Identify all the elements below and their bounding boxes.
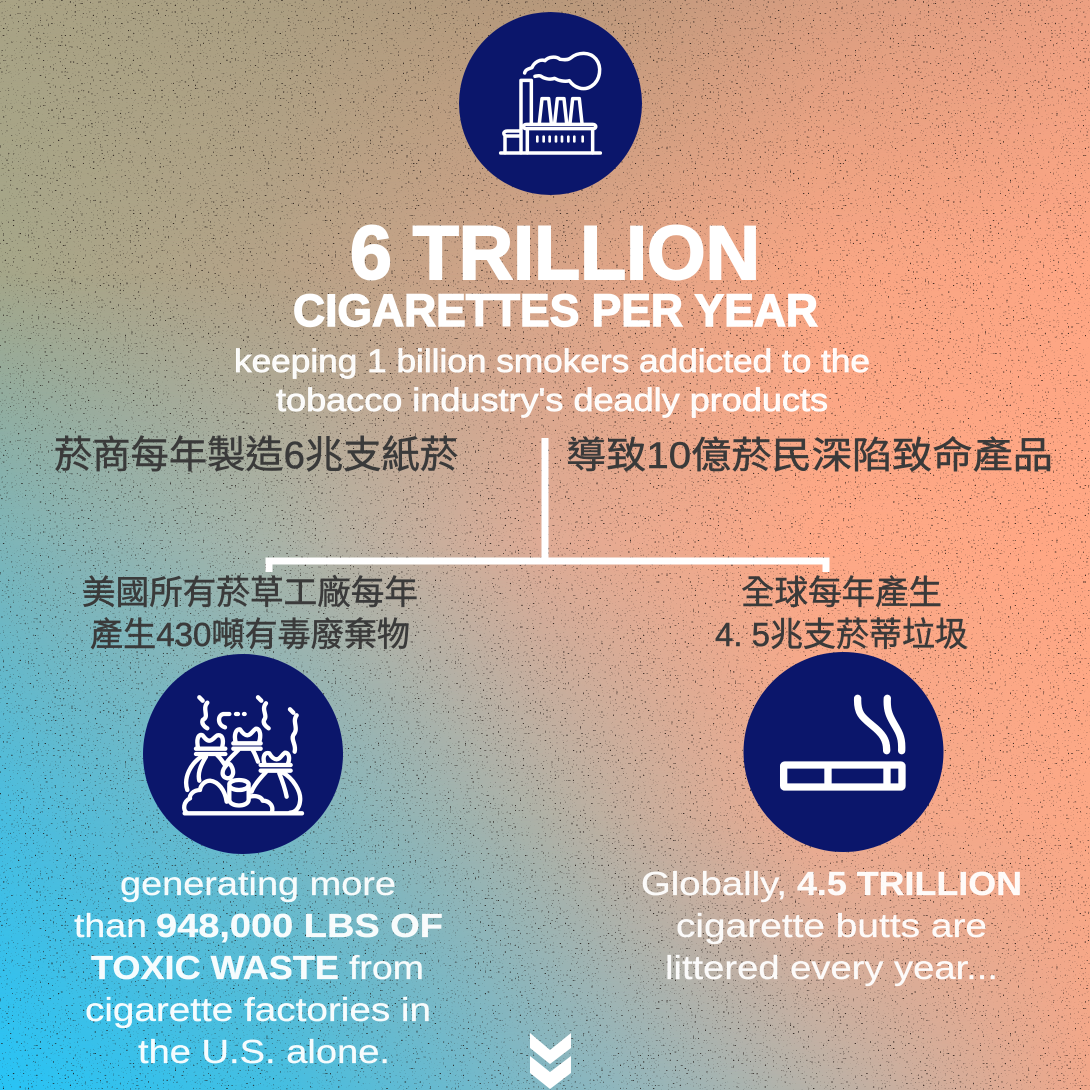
text block: toxic waste: [74, 865, 443, 1070]
text block: toxic waste: than: [74, 907, 147, 944]
arrow: scroll down chevrons: [530, 1033, 571, 1089]
text block: keeping smokers addicted: [234, 343, 870, 418]
chinese heading left: 菸商每年製造6兆支紙菸: [54, 435, 458, 477]
chinese heading right: 導致10億菸民深陷致命產品: [566, 435, 1053, 476]
text block: cigarette butts: cigarette butts are: [676, 907, 987, 944]
text block: cigarette butts: 4.5 TRILLION: [797, 865, 1022, 902]
text block: toxic waste: 948,000 LBS OF: [156, 907, 443, 944]
icon: burning cigarette: [744, 652, 944, 852]
title: 6 trillion: 6 TRILLION: [350, 211, 760, 296]
chinese caption right: [715, 575, 968, 654]
chinese caption right: 全球每年產生: [741, 575, 942, 612]
text block: cigarette butts: [641, 865, 1022, 986]
chinese caption right: 4. 5兆支菸蒂垃圾: [715, 617, 968, 654]
connector: branching tree lines: [269, 438, 826, 572]
text block: toxic waste: cigarette factories in: [85, 991, 431, 1028]
text block: keeping smokers addicted: tobacco industry's deadly products: [276, 382, 828, 418]
text block: cigarette butts: Globally,: [641, 865, 787, 902]
chinese caption left: 產生430噸有毒廢棄物: [90, 617, 410, 654]
text block: toxic waste: TOXIC WASTE: [91, 949, 339, 986]
icon: factory with smoke: [459, 12, 642, 195]
text block: toxic waste: from: [349, 949, 424, 986]
chinese caption left: 美國所有菸草工廠每年: [82, 575, 418, 612]
text block: keeping smokers addicted: keeping 1 billion smokers addicted to the: [234, 343, 870, 379]
chinese caption left: [82, 575, 418, 654]
text block: cigarette butts: littered every year...: [665, 949, 998, 986]
icon: garbage bags with stench: [143, 654, 343, 854]
subtitle: cigarettes per year: CIGARETTES PER YEAR: [293, 285, 818, 336]
text block: toxic waste: the U.S. alone.: [138, 1033, 390, 1070]
text block: toxic waste: generating more: [120, 865, 396, 902]
